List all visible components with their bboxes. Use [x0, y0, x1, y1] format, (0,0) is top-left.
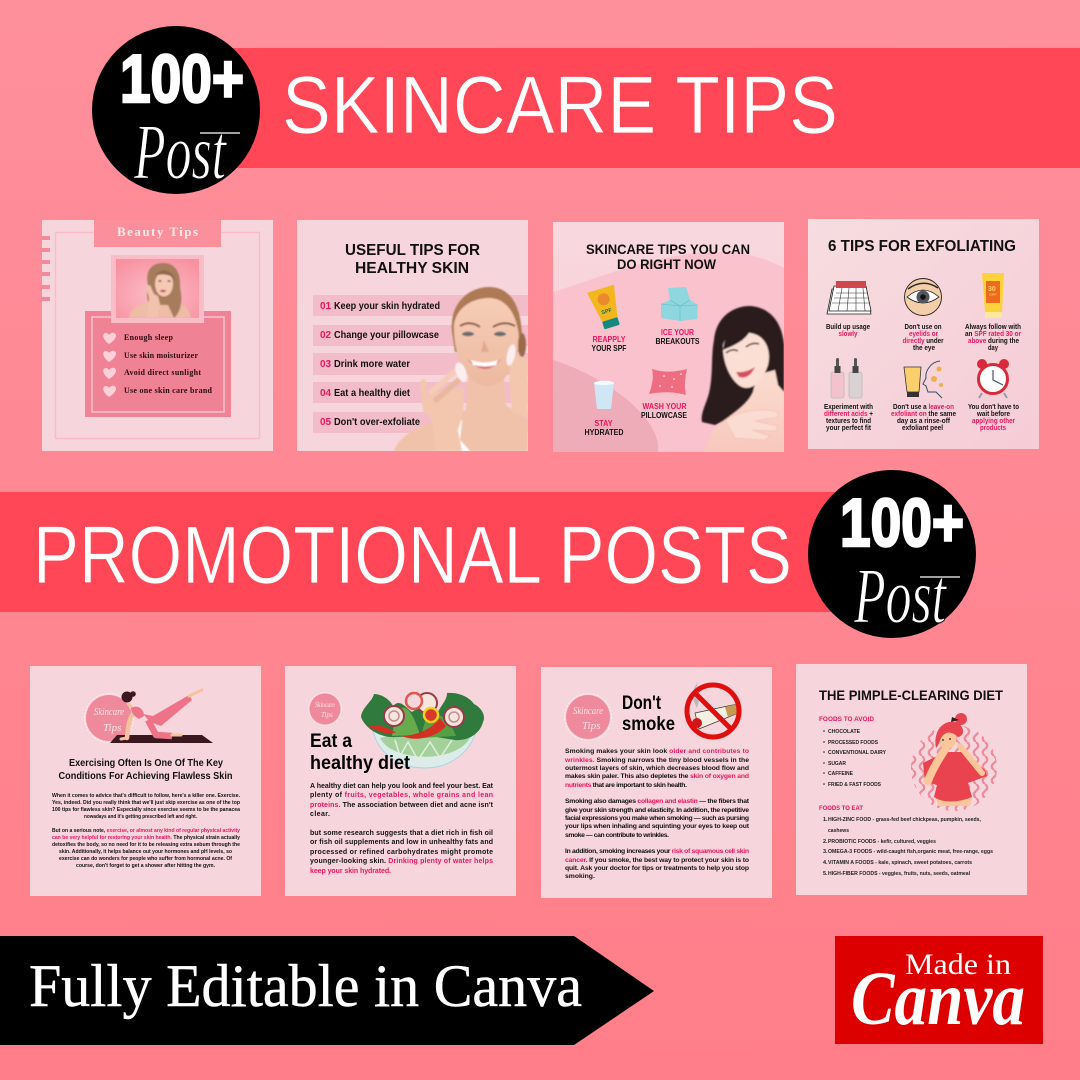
- text: diet body: [310, 783, 494, 875]
- photo: woman with dark hair: [702, 306, 784, 452]
- list: foods to avoid: [819, 716, 886, 788]
- heading: skincare tips: SKINCARE TIPS YOU CAN: [586, 241, 750, 257]
- text: exercise body: Yes, indeed. Did you really think that we'll just skip exercise as one of the top: [52, 800, 240, 806]
- icon: spf tube: SPF: [601, 307, 613, 316]
- icon: sunscreen tube: [982, 273, 1004, 318]
- badge: 100+ post top: Post: [133, 108, 228, 195]
- list: foods to eat: HIGH-FIBER FOODS - veggies, fruits, nuts, seeds, oatmeal: [828, 871, 970, 877]
- label: ice your breakouts: ICE YOUR: [661, 328, 694, 337]
- list: foods to eat: HIGH-ZINC FOOD - grass-fed beef chickpeas, pumpkin, seeds,: [828, 817, 981, 823]
- text: exercise body: nowadays and it's getting prescribed left and right.: [84, 814, 197, 820]
- heading: don't smoke: Don't: [622, 693, 662, 714]
- list: foods to eat: OMEGA-3 FOODS - wild-caught fish,organic meat, free-range, eggs: [828, 849, 993, 855]
- logo: skincare tips circle: Skincare: [573, 706, 603, 717]
- badge: made in canva: Canva: [851, 957, 1025, 1041]
- list: foods to eat: 4.: [823, 860, 828, 866]
- heading: useful tips: USEFUL TIPS FOR: [345, 242, 480, 259]
- text: tip 4: different acids +: [824, 411, 873, 418]
- icon: pillow: [649, 369, 687, 395]
- list: foods to avoid: CONVENTIONAL DAIRY: [828, 750, 886, 756]
- label: ice your breakouts: BREAKOUTS: [656, 337, 700, 346]
- heading: eat a healthy diet: healthy diet: [310, 753, 411, 774]
- text: tip 4: Experiment with: [824, 404, 873, 411]
- text: diet body: plenty of fruits, vegetables, whole grains and lean: [310, 792, 493, 799]
- text: smoking body: Smoking makes your skin look older and contributes to: [565, 748, 749, 755]
- text: tip 4: [824, 404, 873, 432]
- heading: 6 tips: 6 TIPS FOR EXFOLIATING: [828, 238, 1016, 255]
- arrow banner: fully editable in canva: [0, 936, 654, 1045]
- list: foods to eat: 5.: [823, 871, 828, 877]
- text: tip 4: your perfect fit: [826, 425, 872, 432]
- text: tip 6: applying other: [972, 418, 1015, 425]
- label: stay hydrated: [584, 419, 624, 437]
- list: five tips: 05: [320, 417, 332, 428]
- list: five tips: Eat a healthy diet: [334, 388, 411, 399]
- text: exercise body: But on a serious note, exercise, or almost any kind of regular physical activity: [52, 828, 240, 834]
- heading: eat a healthy diet: [310, 731, 411, 774]
- list: foods to eat: 1.: [823, 817, 828, 823]
- box: tips list: Use skin moisturizer: [124, 351, 198, 360]
- icon: eye: [904, 278, 942, 316]
- heading: useful tips: HEALTHY SKIN: [355, 260, 469, 277]
- logo: skincare tips circle: [564, 694, 612, 740]
- text: tip 6: You don't have to: [968, 404, 1019, 411]
- text: diet body: but some research suggests that a diet rich in fish oil: [310, 830, 493, 837]
- heading: exercising often: [58, 757, 232, 782]
- list: five tips: 01: [320, 301, 332, 312]
- list: five tips: Drink more water: [334, 359, 410, 370]
- badge: 100+ post middle: Post: [853, 552, 948, 639]
- text: tip 2: directly under: [902, 338, 944, 345]
- text: tip 3: day: [988, 345, 998, 352]
- icon: sunscreen tube: SPF: [989, 292, 997, 297]
- list: foods to eat: VITAMIN A FOODS - kale, spinach, sweet potatoes, carrots: [828, 860, 972, 866]
- heading: eat a healthy diet: Eat a: [310, 731, 352, 752]
- heading: don't smoke: [622, 693, 675, 735]
- text: tip 5: exfoliant peel: [902, 425, 943, 432]
- heading: don't smoke: smoke: [622, 714, 675, 735]
- icon: water glass: [594, 381, 614, 409]
- text: tip 5: Don't use a leave-on: [893, 404, 954, 411]
- text: tip 1: [826, 324, 870, 338]
- text: tip 3: an SPF rated 30 or: [965, 331, 1021, 338]
- text: smoking body: cancer. If you smoke, the best way to protect your skin is to: [565, 857, 749, 864]
- heading: skincare tips: SKINCARE TIPS: [282, 60, 838, 151]
- list: foods to avoid: PROCESSED FOODS: [828, 740, 878, 746]
- text: exercise body: course, don't forget to get a shower after hitting the gym.: [76, 863, 216, 869]
- box: tips list: Enough sleep: [124, 333, 174, 342]
- box: tips list: Use one skin care brand: [124, 386, 213, 395]
- list: five tips: 04: [320, 388, 332, 399]
- list: five tips: [313, 295, 528, 433]
- panel: skincare tips you can do right now: [553, 222, 784, 452]
- box: tips list: [85, 311, 231, 417]
- list: foods to eat: PROBIOTIC FOODS - kefir, cultured, veggies: [828, 839, 936, 845]
- panel: exercising often: [30, 666, 261, 896]
- text: smoking body: smoking.: [565, 873, 595, 880]
- text: exercise body: [52, 793, 241, 869]
- panel: eat a healthy diet: [285, 666, 516, 896]
- text: smoking body: wrinkles. Smoking narrows the tiny blood vessels in the: [564, 757, 749, 764]
- list: foods to eat: FOODS TO EAT: [819, 805, 864, 812]
- list: foods to eat: cashews: [828, 828, 849, 834]
- icon: ice cubes: [661, 287, 698, 321]
- banner: promotional posts: [0, 492, 860, 612]
- text: exercise body: can be very helpful for restoring your skin health. The physical strain actually: [52, 835, 240, 841]
- logo: skincare tips circle: Skincare: [94, 707, 124, 718]
- text: smoking body: Smoking also damages collagen and elastin — the fibers that: [565, 798, 750, 805]
- list: five tips: 02: [320, 330, 332, 341]
- tab: beauty tips heading: Beauty Tips: [117, 224, 198, 239]
- text: diet body: keep your skin hydrated.: [310, 868, 391, 875]
- list: foods to eat: [819, 805, 993, 877]
- heading: skincare tips: [586, 241, 750, 272]
- label: reapply your spf: YOUR SPF: [592, 344, 627, 353]
- label: reapply your spf: [592, 335, 627, 353]
- icon: spf tube: [587, 285, 626, 331]
- icon: sunscreen tube: 30: [988, 286, 996, 293]
- text: smoking body: give your skin strength and elasticity. In addition, the repetitive: [565, 807, 749, 814]
- panel: don't smoke: [541, 667, 772, 898]
- tab: beauty tips heading: [94, 220, 221, 247]
- text: exercise body: When it comes to advice that's difficult to follow, here's a killer one. Exercise.: [52, 793, 241, 799]
- panel: beauty tips: [42, 220, 273, 451]
- icon: calendar: [827, 281, 871, 314]
- text: smoking body: nutrients that are important to skin health.: [565, 782, 687, 789]
- list: five tips: 03: [320, 359, 332, 370]
- text: diet body: A healthy diet can help you look and feel your best. Eat: [310, 783, 494, 790]
- photo: smiling woman with cotton pads: [394, 287, 528, 451]
- label: ice your breakouts: [656, 328, 700, 346]
- badge: 100+ post middle: [808, 470, 976, 639]
- text: tip 2: Don't use on: [904, 324, 942, 331]
- label: wash your pillowcase: [641, 402, 688, 420]
- text: tip 3: Always follow with: [965, 324, 1021, 331]
- text: diet body: or fish oil supplements and low in unhealthy fats and: [310, 839, 493, 846]
- list: five tips: Don't over-exfoliate: [334, 417, 420, 428]
- list: foods to avoid: FRIED & FAST FOODS: [828, 782, 881, 788]
- heading: exercising often: Conditions For Achieving Flawless Skin: [58, 770, 232, 782]
- box: tips list: Avoid direct sunlight: [124, 368, 201, 377]
- text: diet body: proteins. The association between diet and acne isn't: [310, 802, 494, 809]
- text: diet body: younger-looking skin. Drinking plenty of water helps: [310, 858, 493, 865]
- text: smoking body: facial expressions you make when smoking — such as pursing: [565, 815, 749, 822]
- illustration: yoga pose: [110, 690, 213, 743]
- list: foods to avoid: CAFFEINE: [828, 771, 853, 777]
- text: smoking body: In addition, smoking increases your risk of squamous cell skin: [565, 848, 749, 855]
- logo: skincare tips circle: Tips: [321, 711, 333, 719]
- text: tip 2: eyelids or: [909, 331, 938, 338]
- badge: 100+ post middle: 100+: [840, 485, 964, 561]
- label: reapply your spf: REAPPLY: [592, 335, 626, 344]
- text: smoking body: outermost layers of skin, which decreases blood flow and: [565, 765, 749, 772]
- text: tip 2: the eye: [913, 345, 935, 352]
- text: tip 1: Build up usage: [826, 324, 870, 331]
- text: exercise body: 100 tips for flawless skin? Especially since exercise seems to be the panacea: [52, 807, 240, 813]
- text: diet body: clear.: [310, 811, 330, 818]
- text: tip 2: [902, 324, 944, 352]
- heading: exercising often: Exercising Often Is One Of The Key: [69, 757, 223, 769]
- label: wash your pillowcase: PILLOWCASE: [641, 411, 688, 420]
- heading: useful tips: [345, 242, 480, 277]
- heading: skincare tips: DO RIGHT NOW: [617, 256, 717, 272]
- list: foods to avoid: FOODS TO AVOID: [819, 716, 874, 723]
- badge: 100+ post top: [92, 26, 260, 195]
- list: foods to avoid: SUGAR: [828, 761, 846, 767]
- logo: skincare tips circle: [308, 692, 342, 726]
- list: foods to eat: 3.: [823, 849, 828, 855]
- list: foods to eat: 2.: [823, 839, 828, 845]
- badge: made in canva: [835, 936, 1043, 1044]
- badge: made in canva: Made in: [905, 948, 1011, 981]
- text: smoking body: quit. Ask your doctor for tips or treatments to help you stop: [565, 865, 749, 872]
- text: tip 6: wait before: [976, 411, 1010, 418]
- text: exercise body: skin. Additionally, it helps balance out your hormones and pH levels, so: [59, 849, 232, 855]
- text: diet body: processed or refined carbohydrates might promote: [310, 849, 493, 856]
- text: tip 4: textures to find: [826, 418, 871, 425]
- icon: tube and face: [904, 361, 943, 398]
- text: smoking body: your lips when inhaling and squinting your eyes to keep out: [565, 823, 750, 830]
- text: exercise body: exercise can do wonders for people who suffer from hormonal acne. Of: [59, 856, 232, 862]
- panel: 6 tips for exfoliating: [808, 219, 1039, 449]
- badge: 100+ post top: 100+: [120, 41, 244, 117]
- label: stay hydrated: STAY: [594, 419, 613, 428]
- heading: promotional posts: PROMOTIONAL POSTS: [33, 510, 792, 601]
- list: five tips: Keep your skin hydrated: [334, 301, 440, 312]
- logo: skincare tips circle: Tips: [103, 722, 121, 734]
- list: five tips: Change your pillowcase: [334, 330, 439, 341]
- text: tip 1: slowly: [838, 331, 858, 338]
- icon: dropper bottles: [831, 358, 862, 398]
- list: foods to avoid: CHOCOLATE: [828, 729, 860, 735]
- text: tip 5: exfoliant on the same: [891, 411, 956, 418]
- arrow banner: fully editable in canva: Fully Editable in Canva: [29, 953, 582, 1019]
- banner: skincare tips: [230, 48, 1080, 168]
- panel: useful tips for healthy skin: [297, 220, 528, 451]
- panel: the pimple-clearing diet: [796, 664, 1027, 895]
- text: exercise body: detoxifies the body, so no need for it to be releasing extra sebum through the: [52, 842, 240, 848]
- text: tip 3: [965, 324, 1021, 352]
- text: smoking body: smoke — can contribute to wrinkles.: [565, 832, 669, 839]
- text: tip 5: [891, 404, 956, 432]
- icon: no smoking sign: [687, 682, 741, 737]
- illustration: salad bowl: [361, 693, 484, 768]
- label: wash your pillowcase: WASH YOUR: [642, 402, 687, 411]
- logo: skincare tips circle: [84, 694, 134, 742]
- logo: skincare tips circle: Tips: [582, 720, 600, 732]
- text: tip 6: products: [980, 425, 1006, 432]
- text: tip 6: [968, 404, 1019, 432]
- text: smoking body: [564, 748, 750, 880]
- heading: pimple-clearing diet: THE PIMPLE-CLEARING DIET: [819, 687, 1003, 703]
- text: tip 5: day as a rinse-off: [897, 418, 951, 425]
- photo: beauty model: [111, 255, 204, 323]
- text: tip 3: above during the: [968, 338, 1019, 345]
- text: smoking body: makes skin paler. This also depletes the skin of oxygen and: [565, 773, 749, 780]
- label: stay hydrated: HYDRATED: [584, 428, 624, 437]
- icon: alarm clock: [977, 359, 1009, 398]
- logo: skincare tips circle: Skincare: [315, 701, 335, 709]
- illustration: woman touching pimples: [911, 713, 997, 811]
